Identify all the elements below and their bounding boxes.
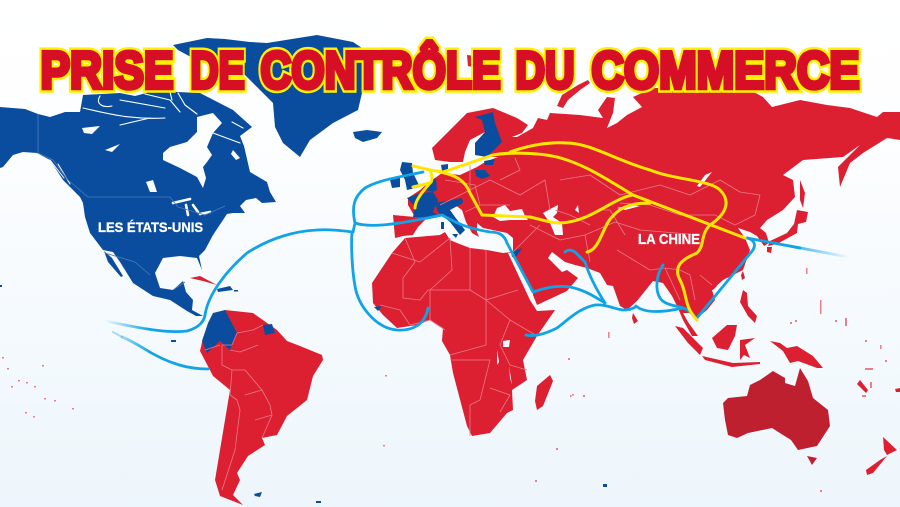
madagascar (535, 375, 553, 410)
baltic states (475, 170, 490, 179)
title: DE (190, 42, 244, 100)
title: DU (516, 42, 574, 100)
country borders (205, 158, 760, 490)
title: DE (190, 42, 244, 100)
arctic channels and great lakes (50, 92, 243, 215)
new guinea (770, 341, 823, 368)
title: CONTRÔLE (260, 41, 500, 100)
colombia and ecuador (202, 310, 237, 353)
france (407, 192, 438, 217)
sumatra (675, 326, 703, 355)
sakhalin (800, 180, 805, 208)
japan (768, 210, 808, 246)
land: Australia (723, 368, 830, 465)
land: blue European and South American countries (202, 112, 522, 497)
falklands (254, 492, 262, 497)
ireland (390, 177, 400, 188)
aral / lakes (575, 205, 579, 213)
great slave lake (105, 144, 120, 152)
benelux (425, 178, 437, 192)
sierra leone (374, 306, 382, 311)
borneo (712, 325, 737, 350)
novaya zemlya (557, 80, 590, 108)
africa (372, 232, 555, 436)
hispaniola (217, 286, 233, 292)
black sea (493, 205, 528, 221)
cuba (190, 276, 217, 285)
hudson bay (163, 113, 222, 188)
label: La Chine: LA CHINE (638, 231, 700, 248)
new zealand (883, 437, 897, 455)
shipping routes (106, 143, 848, 369)
land routes (413, 143, 745, 320)
canada water (82, 113, 240, 192)
north american borders (38, 114, 225, 290)
great bear lake (82, 126, 100, 134)
land: Eurasia (190, 55, 900, 505)
israel (511, 248, 522, 257)
title: DU (516, 42, 574, 100)
greenland (173, 35, 362, 157)
denmark (441, 164, 448, 171)
great britain (400, 162, 420, 190)
caspian (543, 205, 563, 235)
svalbard (467, 55, 475, 67)
sulawesi (740, 338, 755, 360)
south america (200, 310, 323, 505)
land: North America (0, 35, 382, 316)
red sea (508, 253, 533, 300)
lake winnipeg (146, 180, 157, 192)
sri lanka (632, 313, 638, 324)
title: CONTRÔLE (260, 41, 500, 100)
maritime routes (106, 172, 848, 369)
philippines (740, 290, 757, 323)
inland seas (493, 172, 712, 385)
title (40, 41, 860, 100)
lake victoria (503, 340, 510, 347)
java and sunda (702, 356, 760, 367)
title: PRISE (40, 42, 174, 100)
italy (435, 198, 465, 235)
iceland (353, 130, 382, 142)
title: COMMERCE (592, 42, 860, 100)
finland (475, 112, 502, 157)
title: PRISE (40, 42, 174, 100)
icon: small blue islands (0, 285, 607, 503)
small pacific and indian islands (2, 268, 887, 492)
title: COMMERCE (592, 42, 860, 100)
guyana (263, 324, 275, 335)
label: Les États-Unis: LES ÉTATS-UNIS (98, 219, 203, 235)
hainan, taiwan (710, 285, 717, 290)
ungava bay (231, 150, 240, 160)
